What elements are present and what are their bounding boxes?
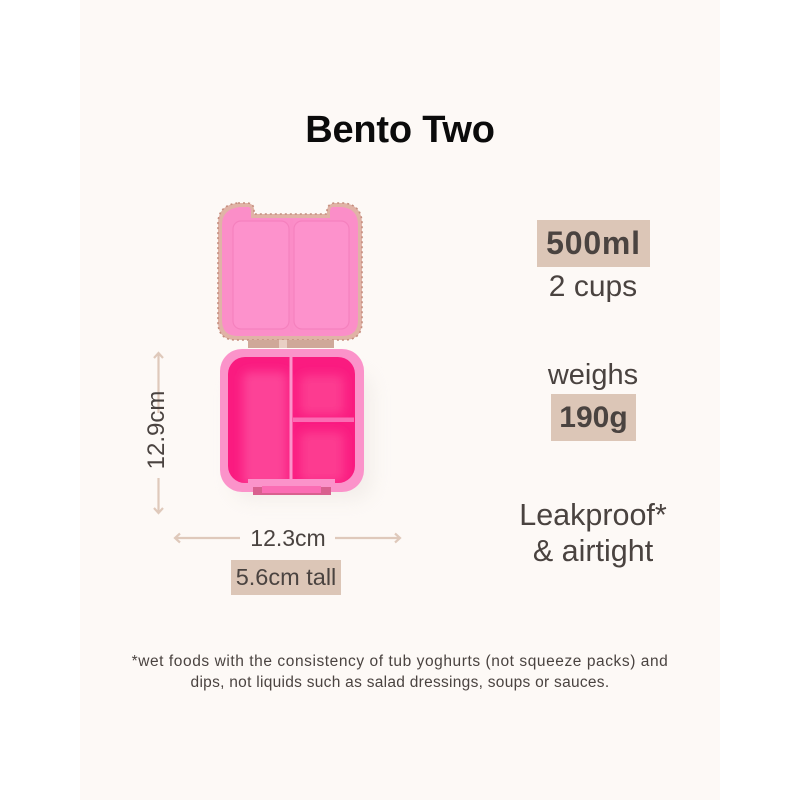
depth tag: 5.6cm tall [236,564,336,590]
footnote: dips, not liquids such as salad dressings, soups or sauces. [191,674,609,691]
footnote [132,653,668,691]
arrow: height, upper [153,352,164,413]
lid hinge [248,340,334,348]
arrow: width, right [335,532,402,544]
background panel [80,0,720,800]
compartment dividers [290,356,292,480]
width label: 12.3cm [250,525,326,551]
title: Bento Two [305,109,495,151]
footnote: *wet foods with the consistency of tub yoghurts (not squeeze packs) and [132,653,668,670]
arrow: width, left [174,532,240,544]
front clip [248,479,335,487]
capacity tag [537,220,650,267]
weight label: weighs [548,359,638,391]
icon: open base with compartments [220,349,364,495]
leakproof text [519,498,667,568]
depth tag [231,560,341,595]
icon: open lid [218,203,362,348]
weight tag [551,394,636,441]
leakproof text: & airtight [533,534,653,568]
capacity tag: 500ml [546,225,641,261]
capacity in cups: 2 cups [549,270,637,303]
weight tag: 190g [559,401,628,434]
arrow: height, lower [153,478,164,514]
leakproof text: Leakproof* [519,498,667,532]
height label: 12.9cm [143,391,170,469]
icon: base shadow [232,372,372,500]
product illustration: bento box [217,202,368,496]
